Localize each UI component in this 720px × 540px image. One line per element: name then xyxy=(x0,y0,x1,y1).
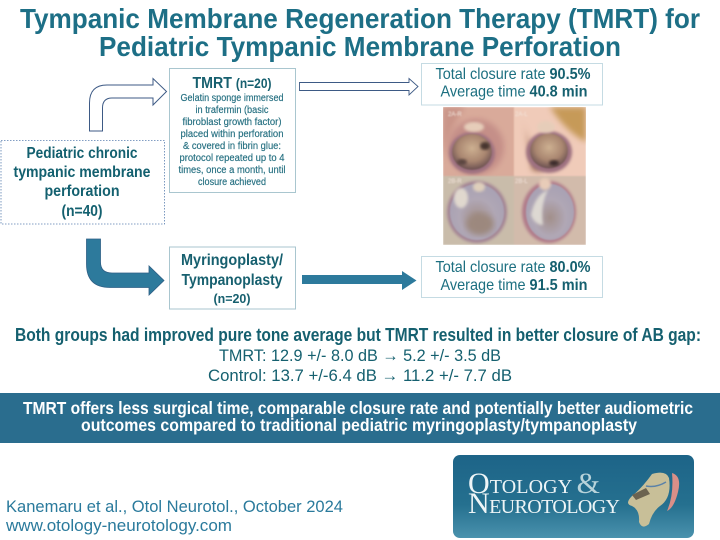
photo: 2A-R xyxy=(443,107,514,176)
panel: TMRT result: Average time 40.8 min xyxy=(440,84,588,100)
photo: 2A-L xyxy=(514,107,586,176)
journal logo xyxy=(453,455,694,538)
citation xyxy=(5,498,343,535)
panel: myringoplasty result: Average time 91.5 min xyxy=(440,277,588,294)
panel: patient population xyxy=(1,140,164,224)
panel: patient population: (n=40) xyxy=(62,203,102,220)
panel: TMRT: fibroblast growth factor) xyxy=(182,117,282,128)
panel: myringoplasty result: Total closure rate 80.0% xyxy=(436,259,590,276)
ear photographs xyxy=(443,107,586,245)
panel: myringoplasty: Tympanoplasty xyxy=(182,272,283,289)
audiometric findings: Control: 13.7 +/-6.4 dB → 11.2 +/- 7.7 dB xyxy=(208,366,512,385)
title: Tympanic Membrane Regeneration Therapy (TMRT) for xyxy=(20,3,700,34)
panel: TMRT xyxy=(170,68,296,192)
title xyxy=(20,3,700,62)
panel: TMRT: times, once a month, until xyxy=(178,165,286,176)
arrow: TMRT to result xyxy=(300,78,418,95)
panel: TMRT: Gelatin sponge immersed xyxy=(180,93,284,104)
citation: Kanemaru et al., Otol Neurotol., October 2024 xyxy=(6,498,343,516)
arrow: myringoplasty to result xyxy=(302,271,416,290)
panel: myringoplasty: Myringoplasty/ xyxy=(181,252,284,269)
photo: 2B-L xyxy=(514,176,586,245)
conclusion banner: outcomes compared to traditional pediatric myringoplasty/tympanoplasty xyxy=(81,415,637,435)
panel: patient population: Pediatric chronic xyxy=(26,145,138,162)
photo: 2B-L: 2B-L xyxy=(515,179,528,185)
panel: TMRT: closure achieved xyxy=(198,177,266,188)
panel: TMRT: protocol repeated up to 4 xyxy=(180,153,285,164)
panel: TMRT: & covered in fibrin glue: xyxy=(183,141,281,152)
panel: myringoplasty: (n=20) xyxy=(214,292,250,306)
photo: 2A-L: 2A-L xyxy=(515,112,528,118)
panel: myringoplasty result xyxy=(422,256,602,298)
arrow: up to TMRT xyxy=(90,78,166,131)
audiometric findings: TMRT: 12.9 +/- 8.0 dB → 5.2 +/- 3.5 dB xyxy=(219,346,501,365)
journal logo: NEUROTOLOGY xyxy=(468,487,620,520)
photo: 2B-R: 2B-R xyxy=(448,179,462,185)
journal logo: OTOLOGY & xyxy=(468,467,600,500)
arrow: down to myringoplasty xyxy=(86,239,164,295)
panel: patient population: perforation xyxy=(44,183,120,200)
panel: TMRT: TMRT (n=20) xyxy=(192,75,272,92)
panel: TMRT result: Total closure rate 90.5% xyxy=(436,66,590,83)
panel: TMRT: placed within perforation xyxy=(180,129,284,140)
panel: TMRT result xyxy=(422,64,602,105)
title: Pediatric Tympanic Membrane Perforation xyxy=(99,31,621,62)
panel: TMRT: in trafermin (basic xyxy=(196,105,268,116)
photo: 2B-R xyxy=(443,176,514,245)
panel: patient population: tympanic membrane xyxy=(14,164,151,181)
photo: 2A-R: 2A-R xyxy=(448,112,462,118)
panel: myringoplasty xyxy=(170,247,296,309)
conclusion banner xyxy=(0,393,720,443)
citation: www.otology-neurotology.com xyxy=(5,517,232,535)
audiometric findings xyxy=(15,325,701,385)
icon: temporal bone xyxy=(628,473,679,527)
